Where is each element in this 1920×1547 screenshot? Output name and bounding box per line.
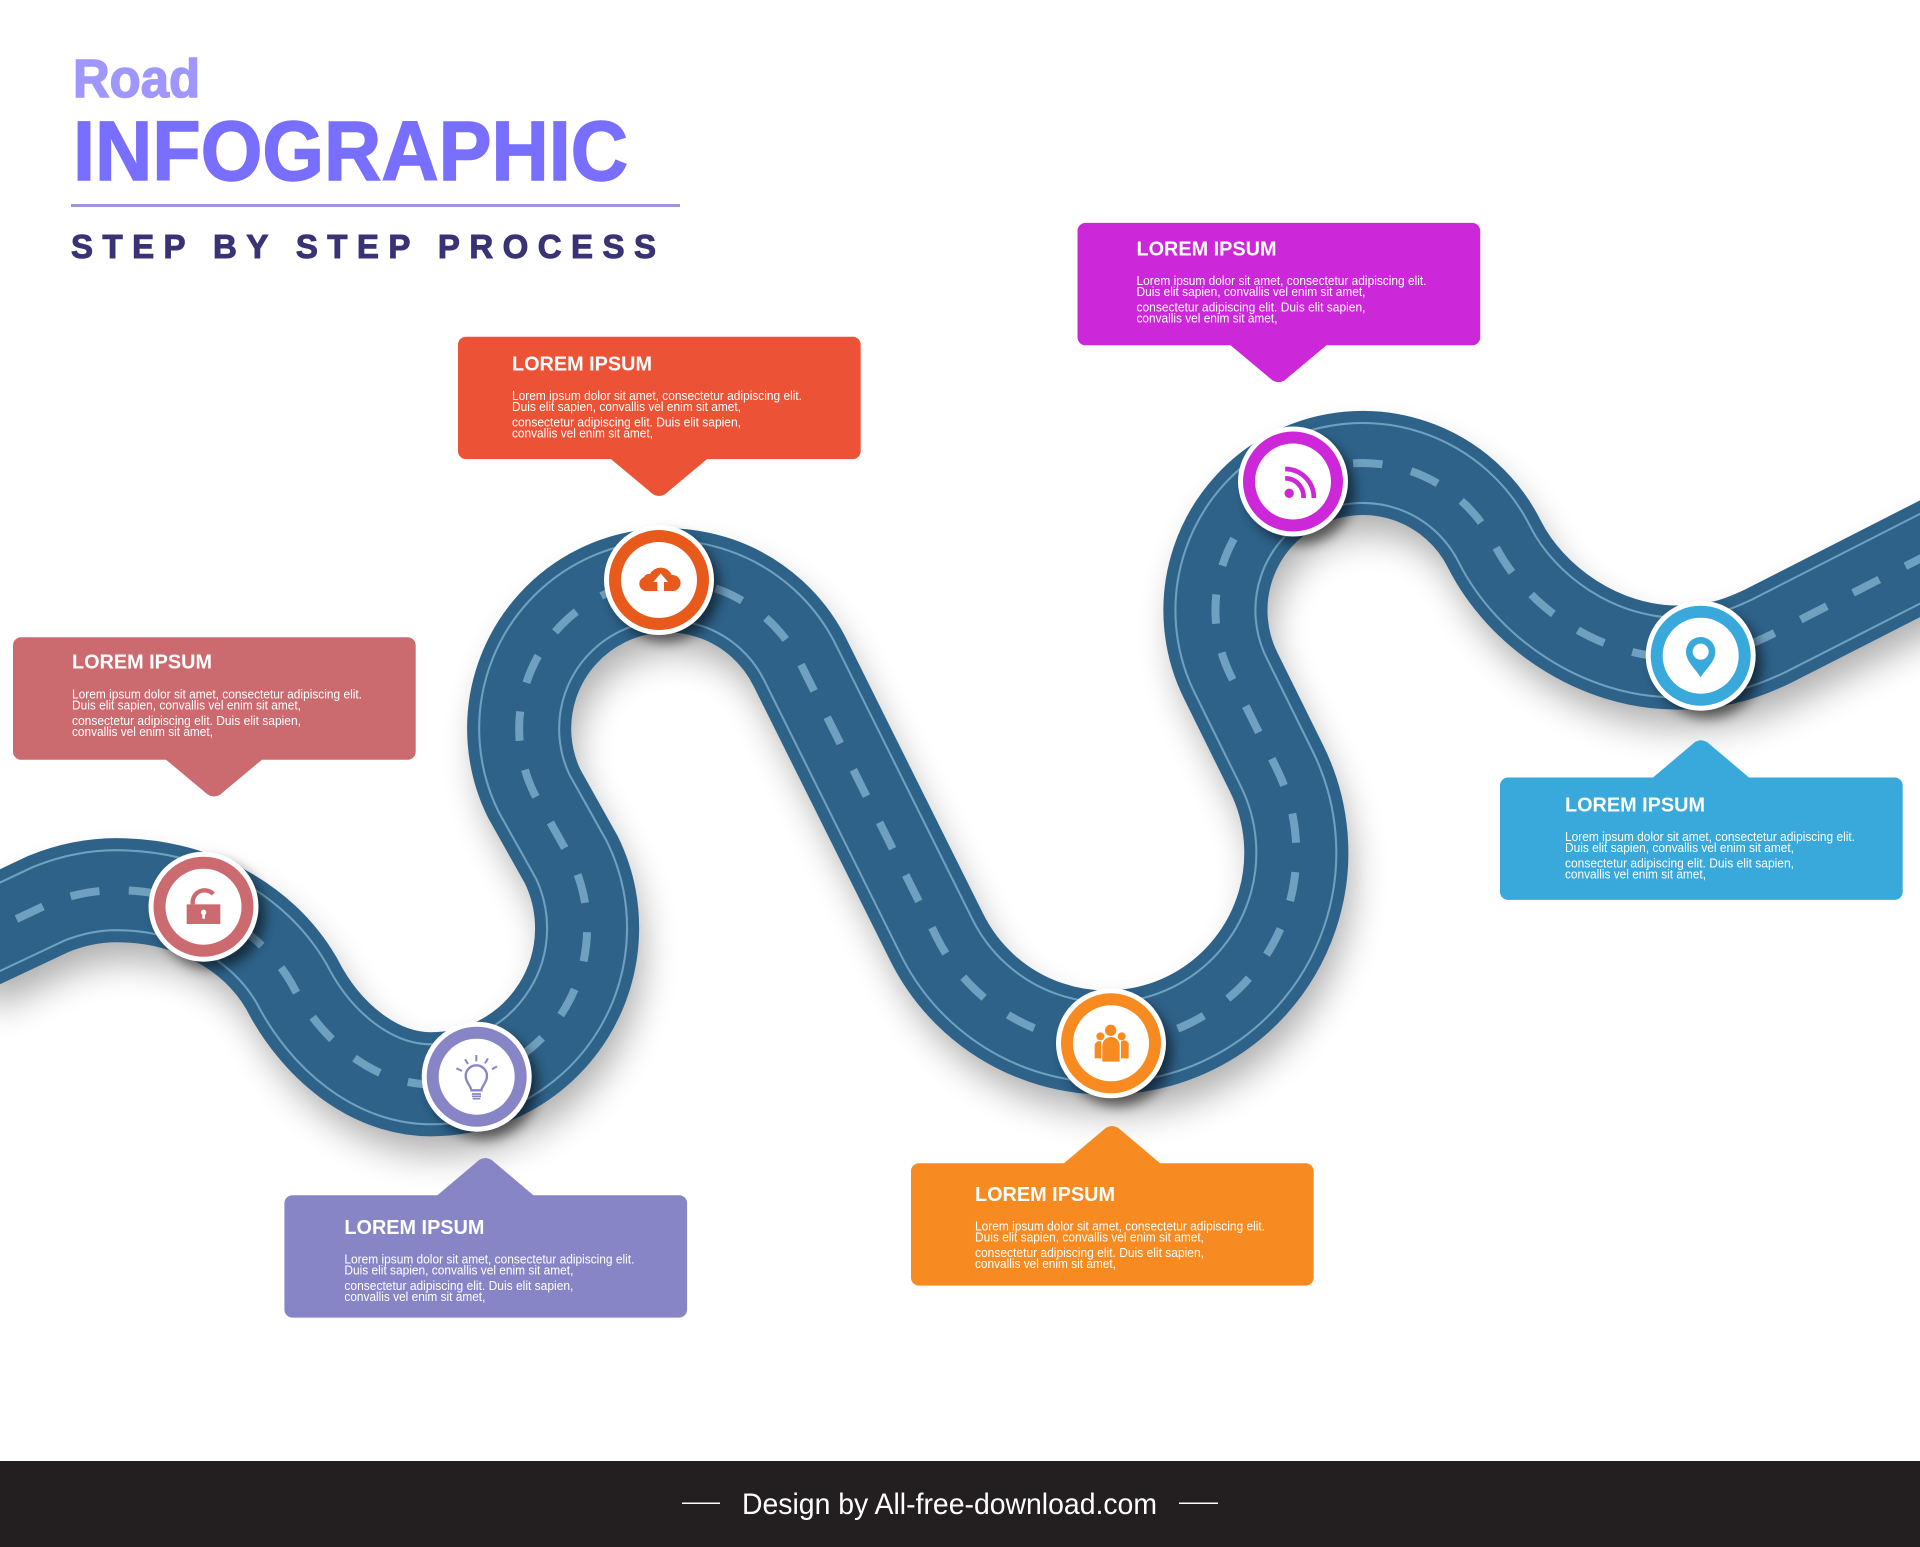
footer credit: Design by All-free-download.com (742, 1488, 1157, 1521)
callout text: consectetur adipiscing elit. Duis elit sapien, (344, 1278, 573, 1293)
callout text: LOREM IPSUM (72, 650, 212, 673)
marker: location pin (1646, 601, 1762, 718)
callout text: convallis vel enim sit amet, (1565, 866, 1706, 882)
icon: light bulb (456, 1055, 497, 1099)
callout text (1565, 794, 1855, 882)
callout text: Lorem ipsum dolor sit amet, consectetur adipiscing elit. (72, 686, 362, 701)
marker: light bulb (422, 1022, 538, 1139)
icon: location pin (1686, 637, 1715, 677)
footer bar (0, 1461, 1920, 1547)
callout text: convallis vel enim sit amet, (975, 1256, 1116, 1271)
callout text: convallis vel enim sit amet, (344, 1289, 485, 1304)
callout text (1136, 237, 1426, 325)
callout text (72, 650, 362, 739)
callout text: Duis elit sapien, convallis vel enim sit amet, (72, 697, 301, 712)
callout text: consectetur adipiscing elit. Duis elit sapien, (975, 1245, 1204, 1260)
callout: magenta (1078, 223, 1480, 382)
callout text: consectetur adipiscing elit. Duis elit sapien, (1136, 299, 1366, 314)
marker: cloud upload (604, 525, 720, 642)
icon: rss feed (1284, 469, 1314, 498)
callout text: Duis elit sapien, convallis vel enim sit amet, (344, 1263, 573, 1278)
subtitle: STEP BY STEP PROCESS (71, 228, 656, 265)
callout text: LOREM IPSUM (512, 353, 652, 376)
icon: open padlock (187, 890, 220, 924)
marker: people (1056, 988, 1172, 1106)
callout text (344, 1216, 634, 1304)
title: Road: Road (73, 49, 200, 109)
callout text: convallis vel enim sit amet, (1136, 310, 1278, 325)
callout text: LOREM IPSUM (344, 1216, 484, 1239)
callout text: Duis elit sapien, convallis vel enim sit amet, (512, 399, 741, 414)
callout text: convallis vel enim sit amet, (512, 426, 653, 441)
callout text: consectetur adipiscing elit. Duis elit sapien, (72, 713, 301, 728)
callout text (512, 353, 802, 441)
marker: rss (1238, 426, 1354, 544)
callout text (975, 1183, 1265, 1271)
callout text: Duis elit sapien, convallis vel enim sit amet, (1565, 840, 1794, 855)
callout text: Duis elit sapien, convallis vel enim sit amet, (1136, 284, 1366, 299)
callout: pink (13, 637, 416, 797)
icon: people group (1095, 1025, 1129, 1062)
callout: orange (911, 1126, 1314, 1286)
callout: blue (1500, 740, 1903, 900)
road (0, 463, 1920, 1106)
callout text: LOREM IPSUM (1565, 794, 1705, 816)
title: INFOGRAPHIC: INFOGRAPHIC (73, 104, 628, 198)
callout: purple (284, 1158, 687, 1318)
callout text: LOREM IPSUM (975, 1183, 1115, 1206)
marker: lock (148, 852, 265, 969)
callout text: convallis vel enim sit amet, (72, 724, 213, 739)
icon: cloud upload (639, 568, 681, 592)
callout text: LOREM IPSUM (1136, 237, 1276, 260)
callout text: Lorem ipsum dolor sit amet, consectetur adipiscing elit. (1136, 273, 1426, 288)
callout text: Lorem ipsum dolor sit amet, consectetur adipiscing elit. (512, 388, 802, 403)
callout: red (458, 337, 861, 496)
callout text: Lorem ipsum dolor sit amet, consectetur adipiscing elit. (344, 1252, 634, 1267)
callout text: consectetur adipiscing elit. Duis elit sapien, (1565, 856, 1794, 870)
callout text: Lorem ipsum dolor sit amet, consectetur adipiscing elit. (1565, 829, 1855, 844)
callout text: consectetur adipiscing elit. Duis elit sapien, (512, 415, 741, 430)
callout text: Duis elit sapien, convallis vel enim sit amet, (975, 1230, 1204, 1245)
callout text: Lorem ipsum dolor sit amet, consectetur adipiscing elit. (975, 1219, 1265, 1234)
